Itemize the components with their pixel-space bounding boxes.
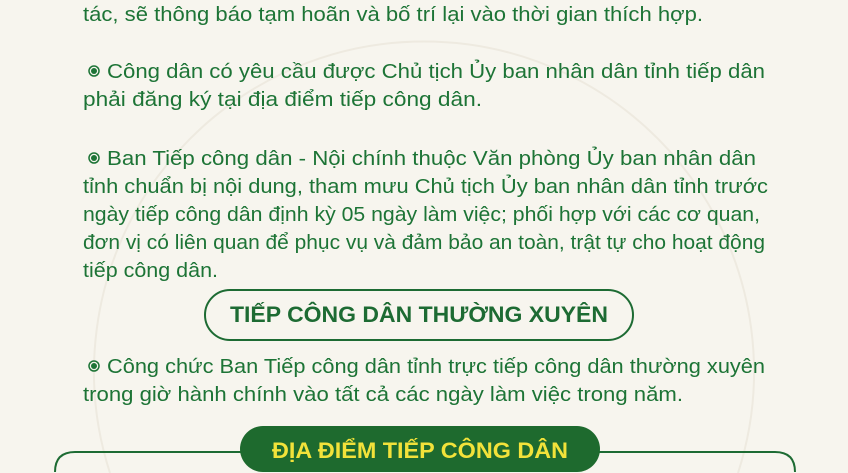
heading: regular reception: TIẾP CÔNG DÂN THƯỜNG XUYÊN bbox=[230, 302, 608, 327]
panel: location outline box bbox=[55, 452, 795, 472]
text block: preparation bullet: ngày tiếp công dân định kỳ 05 ngày làm việc; phối hợp với các cơ quan, bbox=[83, 204, 760, 226]
text block: registration bullet: phải đăng ký tại địa điểm tiếp công dân. bbox=[83, 89, 482, 111]
text block: regular reception bullet: Công chức Ban Tiếp công dân tỉnh trực tiếp công dân thường xuyên bbox=[107, 356, 765, 378]
text block: regular reception bullet bbox=[83, 356, 765, 406]
heading: location pill bbox=[240, 426, 600, 472]
text block: registration bullet bbox=[83, 59, 765, 111]
text block: preparation bullet: Ban Tiếp công dân - Nội chính thuộc Văn phòng Ủy ban nhân dân bbox=[107, 146, 756, 170]
heading: location pill: ĐỊA ĐIỂM TIẾP CÔNG DÂN bbox=[272, 438, 568, 463]
heading: regular reception bbox=[205, 290, 633, 340]
text block: regular reception bullet: trong giờ hành chính vào tất cả các ngày làm việc trong năm. bbox=[83, 384, 683, 406]
text block: preparation bullet bbox=[83, 146, 768, 282]
text block: first paragraph tail: tác, sẽ thông báo tạm hoãn và bố trí lại vào thời gian thích hợp. bbox=[83, 4, 703, 26]
text block: preparation bullet: tiếp công dân. bbox=[83, 260, 218, 282]
text block: preparation bullet: tỉnh chuẩn bị nội dung, tham mưu Chủ tịch Ủy ban nhân dân tỉnh trước bbox=[83, 174, 768, 198]
text block: registration bullet: Công dân có yêu cầu được Chủ tịch Ủy ban nhân dân tỉnh tiếp dân bbox=[107, 59, 765, 83]
text block: preparation bullet: đơn vị có liên quan để phục vụ và đảm bảo an toàn, trật tự cho hoạt động bbox=[83, 232, 765, 254]
